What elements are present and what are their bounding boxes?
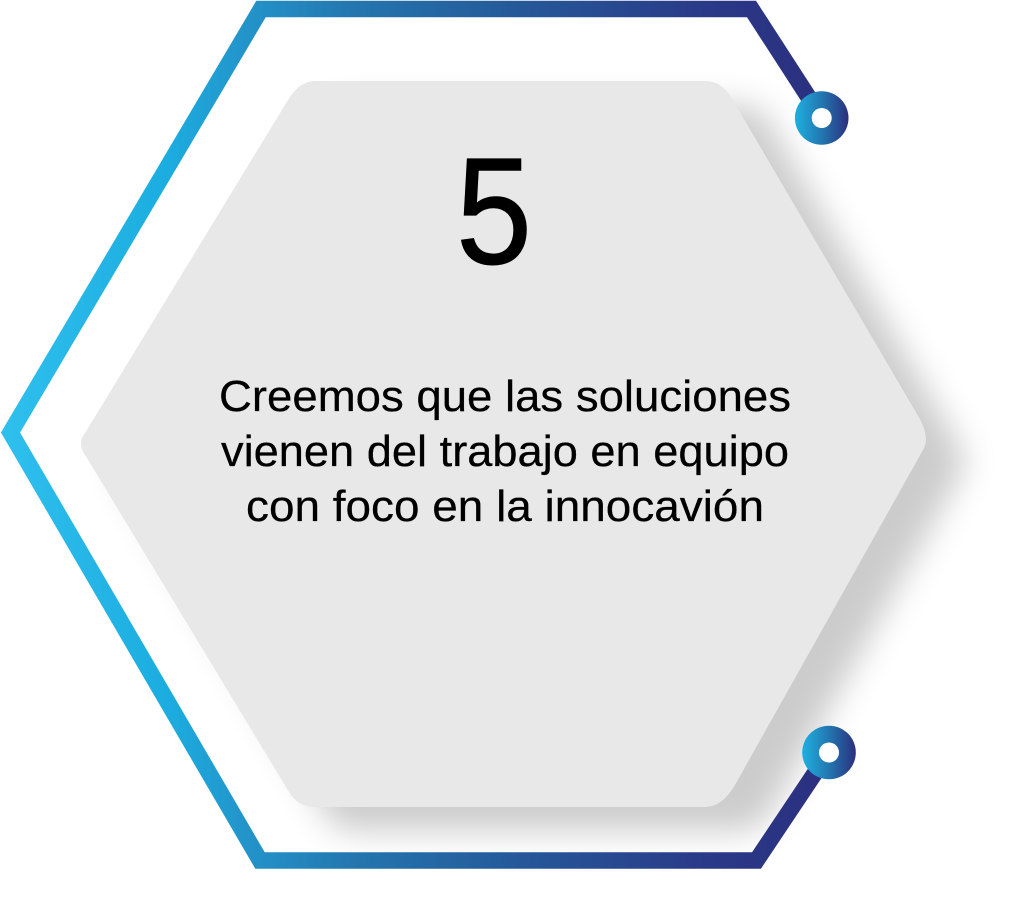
hexagon panel shadow [119, 105, 964, 831]
hexagon outline with gradient [10, 9, 829, 860]
icon: top connector ring [795, 91, 848, 145]
text block: statement: vienen del trabajo en equipo [221, 427, 789, 476]
text block: statement: con foco en la innocavión [246, 482, 764, 531]
text block: statement: Creemos que las soluciones [219, 372, 791, 421]
panel: grey hexagon [81, 81, 926, 807]
text block: statement [219, 372, 791, 531]
icon: bottom connector ring [802, 726, 856, 779]
heading: number: 5 [456, 126, 532, 296]
